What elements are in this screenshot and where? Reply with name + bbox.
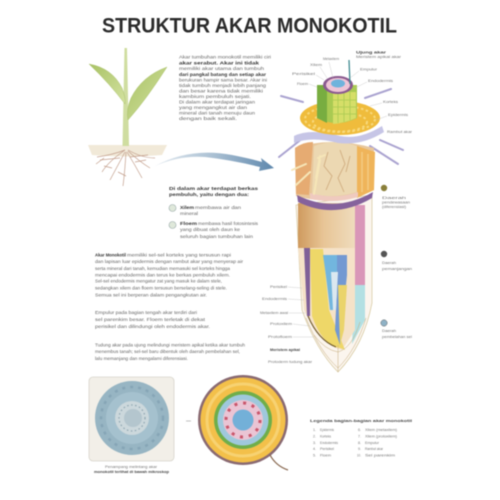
- legend: Xilem (protoxilem): [365, 434, 398, 438]
- labels: top root: Korteks: [383, 99, 398, 104]
- text block: main paragraph: sedangkan xilem dan floem tersusun berselang-seling di stele.: [95, 286, 227, 292]
- icon: elongation zone marker: [381, 251, 387, 257]
- cortex: [200, 378, 286, 462]
- core: [124, 409, 142, 427]
- green shade: [317, 85, 327, 123]
- yellow strip: [310, 249, 345, 350]
- text block: root types: seluruh bagian tumbuhan lain: [180, 234, 253, 240]
- illustration: root cross-section 3D: [279, 60, 403, 372]
- lavender layer: [294, 126, 384, 144]
- legend: Floem: [320, 452, 331, 458]
- text block: intro: Di dalam akar terdapat jaringan: [179, 100, 255, 106]
- text block: main paragraph: Sel-sel endodermis mengatur zat yang masuk ke dalam stele,: [95, 278, 222, 284]
- cortex highlight: [207, 384, 279, 456]
- upper tan cylinder: [298, 203, 355, 249]
- protruding pith marker: [349, 60, 350, 84]
- photo frame: [89, 377, 174, 461]
- text block: second paragraph: sel parenkim besar. Floem terletak di dekat: [95, 317, 206, 323]
- yellow cortex disk: [300, 101, 380, 135]
- label: maturation zone: Daerah: [382, 195, 406, 200]
- legend: Sel parenkim: [365, 452, 395, 458]
- text block: second paragraph: Empulur pada bagian tengah akar terdiri dari: [95, 310, 197, 316]
- arrow: plant to root detail: [155, 153, 274, 171]
- labels: left root tip: [260, 284, 314, 364]
- text block: intro: tidak tumbuh menjadi lebih panjang: [179, 83, 266, 89]
- text block: third paragraph: [95, 342, 245, 362]
- text block: intro: memiliki akar utama dan tumbuh: [179, 66, 264, 72]
- stele: [218, 394, 268, 446]
- inner texture: [312, 142, 357, 196]
- aqua strip: [352, 285, 365, 344]
- labels: left root tip: Meristem apikal: [270, 347, 300, 352]
- orange stripes: [362, 152, 368, 192]
- legend: [310, 418, 412, 458]
- yellow inner wedge: [338, 285, 347, 345]
- legend: Empulur: [365, 440, 380, 445]
- legend: Legenda bagian-bagian akar monokotil: [310, 418, 412, 423]
- labels: left root tip: Endodermis: [262, 296, 287, 301]
- pink ring: [326, 78, 350, 92]
- caption: micrograph: Penampang melintang akar: [105, 464, 158, 469]
- darker patches: [101, 387, 163, 449]
- legend: 9.: [358, 446, 361, 451]
- legend: Endodermis: [320, 440, 338, 445]
- root outer sheath: [296, 195, 372, 372]
- legend: 10.: [357, 452, 361, 458]
- text block: intro: akar serabut. Akar ini tidak: [179, 60, 259, 66]
- labels: left root tip: Protofloem: [268, 334, 292, 339]
- legend: Xilem (metaxilem): [365, 427, 398, 432]
- label: maturation zone: (diferensiasi): [382, 204, 407, 209]
- vascular core: [331, 80, 345, 88]
- label: maturation zone: pendewasaan: [382, 200, 410, 204]
- text block: intro: yang mengangkut air dan: [179, 105, 247, 111]
- text block: third paragraph: Tudung akar pada ujung melindungi meristem apikal ketika akar tumbuh: [95, 342, 245, 348]
- text block: intro: [179, 54, 271, 122]
- purple strip: [304, 248, 310, 316]
- legend: 7.: [358, 434, 361, 438]
- text block: main paragraph: memiliki sel-sel korteks yang tersusun rapi: [127, 252, 231, 258]
- legend: 1.: [313, 427, 316, 432]
- caption: micrograph: [94, 464, 170, 474]
- blue strip left: [323, 255, 337, 310]
- orange side right: [357, 146, 375, 198]
- legend: Perisikel: [320, 446, 334, 451]
- left leaf: [89, 64, 125, 104]
- text block: intro: mineral dari tanah menuju daun: [179, 110, 255, 116]
- root hair: [270, 455, 288, 470]
- legend: 5.: [313, 452, 316, 458]
- caption: micrograph: monokotil terlihat di bawah mikroskop: [94, 469, 170, 474]
- labels: top root: Ujung akar: [356, 50, 387, 54]
- text block: root types: mineral: [180, 211, 198, 217]
- leader tick between panels: [186, 420, 191, 422]
- labels: left root tip: Perisikel: [270, 284, 287, 289]
- text block: root types: Xilem: [180, 205, 194, 211]
- pink-yellow band: [310, 192, 358, 201]
- body mottling: [324, 150, 350, 192]
- panel: micrograph photo: [89, 377, 174, 461]
- text block: third paragraph: lalu memanjang dan mengalami diferensiasi.: [95, 356, 188, 362]
- icon: division zone marker: [381, 320, 387, 326]
- text block: root types: membawa air dan: [195, 205, 241, 211]
- title: STRUKTUR AKAR MONOKOTIL: [102, 14, 397, 38]
- label: division zone: pembelahan sel: [382, 334, 412, 339]
- text block: intro: berukuran hampir sama besar. Akar ini: [179, 78, 267, 84]
- blue strip right: [335, 255, 347, 345]
- labels: top root: [292, 50, 413, 134]
- lower cream area: [298, 248, 355, 350]
- endodermis: [214, 391, 272, 449]
- outer layer: [198, 375, 288, 465]
- label: division zone: [382, 328, 412, 339]
- label: division zone: Daerah: [382, 328, 396, 333]
- text block: root types: Floem: [180, 221, 197, 227]
- text block: main paragraph: mencapai endodermis dan terus ke berkas pembuluh xilem.: [95, 272, 230, 278]
- legend: 3.: [313, 440, 316, 445]
- dark band: [308, 316, 336, 347]
- tan body: [295, 142, 374, 201]
- text block: intro: dengan baik sekali.: [179, 116, 237, 122]
- vascular bundles: [226, 403, 260, 437]
- tissue inner ring: [106, 392, 158, 444]
- legend: 8.: [358, 440, 361, 445]
- illustration: monocot plant: [88, 48, 167, 186]
- text block: main paragraph: dan lapisan luar epidermis dengan rambut akar yang menyerap air: [95, 259, 243, 265]
- text block: second paragraph: perisikel dan dilindungi oleh endodermis akar.: [95, 324, 210, 330]
- pale inner wedge: [331, 272, 338, 310]
- text block: root types: Di dalam akar terdapat berkas: [169, 186, 258, 192]
- labels: top root: Empulur: [360, 66, 378, 72]
- purple ring: [297, 192, 373, 210]
- stele: [115, 401, 149, 435]
- text block: main paragraph: serta mineral dari tanah, kemudian memasuki sel korteks hingga: [95, 266, 230, 272]
- legend: Rambut akar: [365, 446, 384, 451]
- labels: top root: Perisikel: [292, 71, 315, 76]
- text block: root types: membawa hasil fotosintesis: [198, 221, 259, 227]
- vascular ring: [323, 76, 353, 94]
- labels: left root tip: Metaxilem awal: [260, 310, 288, 315]
- text block: main paragraph: Akar Monokotil: [95, 252, 126, 258]
- text block: intro: Akar tumbuhan monokotil memiliki ciri: [179, 54, 271, 60]
- labels: left root tip: Protoderm tudung akar: [268, 359, 313, 364]
- text block: root types: [169, 186, 259, 240]
- labels: top root: Endodermis: [368, 78, 393, 83]
- xylem dots: [119, 405, 145, 431]
- text block: intro: dan besar karena tidak memiliki: [179, 88, 263, 94]
- labels: top root: Floem: [297, 81, 308, 86]
- cortex cell dots inner: [313, 112, 367, 132]
- label: maturation zone: [382, 195, 410, 209]
- cream root hairs: [292, 155, 325, 194]
- grid lines: [333, 92, 356, 123]
- roots: [96, 150, 155, 186]
- pith: [232, 410, 254, 430]
- icon: xylem: [169, 204, 176, 212]
- green cylinder: [317, 85, 357, 123]
- labels: left root tip: Protoxilem: [270, 321, 292, 326]
- pink outer strip: [355, 205, 365, 285]
- root cap lines: [306, 318, 366, 372]
- label: elongation zone: [382, 260, 412, 271]
- labels: top root: Meristem apikal akar: [356, 54, 402, 59]
- right leaf: [127, 67, 167, 120]
- vascular ring: [223, 400, 263, 440]
- icon: phloem: [169, 222, 176, 228]
- soil: [88, 145, 167, 156]
- lavender root hairs: [279, 89, 403, 164]
- stem: [122, 48, 129, 146]
- labels: top root: Rambut akar: [387, 129, 413, 134]
- text block: root types: pembuluh, yaitu dengan dua:: [169, 192, 249, 198]
- icon: maturation zone marker: [381, 185, 387, 191]
- text block: intro: kambium pembuluh sejati.: [179, 94, 251, 100]
- text block: root types: yang dibuat oleh daun ke: [180, 227, 240, 233]
- labels: top root: Xilem: [310, 62, 322, 67]
- tissue section: [95, 381, 169, 455]
- text block: third paragraph: menembus tanah; sel-sel baru dibentuk oleh daerah pembelahan sel,: [95, 349, 240, 355]
- legend: Epidermis: [320, 427, 334, 432]
- legend: 4.: [313, 446, 316, 451]
- text block: main paragraph: Semua sel ini berperan dalam pengangkutan air.: [95, 292, 207, 298]
- text block: main paragraph: [95, 252, 243, 298]
- labels: top root: Epidermis: [388, 112, 408, 117]
- label: elongation zone: Daerah: [382, 260, 396, 265]
- orange side left: [295, 142, 313, 195]
- legend: 6.: [358, 427, 361, 432]
- legend: Korteks: [320, 434, 331, 438]
- text block: second paragraph: [95, 310, 210, 330]
- label: elongation zone: pemanjangan: [382, 266, 412, 271]
- cortex cell dots: [305, 106, 375, 132]
- legend: 2.: [313, 434, 316, 438]
- text block: intro: dari pangkal batang dan setiap akar: [179, 72, 266, 78]
- yellow-green grid: [333, 92, 356, 124]
- diagram: root cross-section: [198, 375, 288, 470]
- labels: top root: Metaxilem: [323, 56, 339, 61]
